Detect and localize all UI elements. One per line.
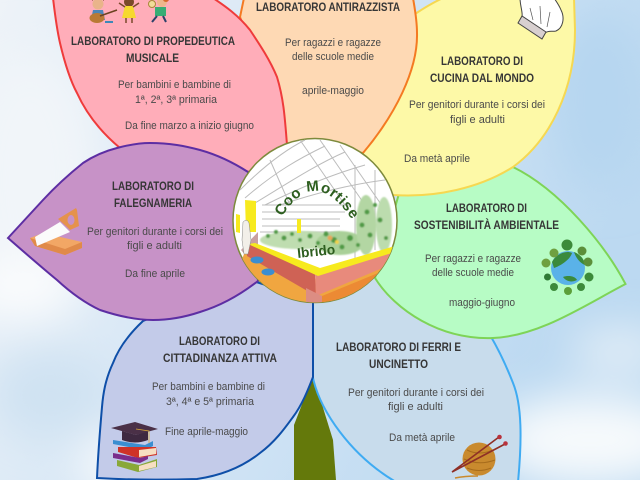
panel: laboratorio di falegnameria <box>8 143 258 320</box>
text: destinatari e periodo cittadinanza: Fine aprile-maggio <box>165 426 248 438</box>
text: destinatari e periodo musicale <box>118 79 254 132</box>
heading: ferri e uncinetto: UNCINETTO <box>369 357 428 371</box>
label: Ibrido: Ibrido <box>296 241 336 261</box>
heading: falegnameria <box>112 179 194 210</box>
heading: falegnameria: FALEGNAMERIA <box>114 196 192 210</box>
text: destinatari e periodo ferri <box>348 387 484 444</box>
text: destinatari e periodo cucina: Per genitori durante i corsi dei <box>409 99 545 111</box>
counter <box>242 253 390 302</box>
roof lines <box>240 140 385 260</box>
heading: ferri e uncinetto: LABORATORO DI FERRI E <box>336 340 461 354</box>
text: destinatari e periodo antirazzista: Per ragazzi e ragazze <box>285 37 381 49</box>
text: destinatari e periodo falegnameria <box>87 226 223 280</box>
heading: falegnameria: LABORATORO DI <box>112 179 194 193</box>
trunk <box>294 376 336 480</box>
text: destinatari e periodo musicale: Per bambini e bambine di <box>118 79 231 91</box>
plants <box>260 195 392 255</box>
heading: cittadinanza attiva: LABORATORO DI <box>179 334 260 348</box>
heading: propedeutica musicale: MUSICALE <box>126 51 179 65</box>
label: Coo Mortise: Coo Mortise <box>276 180 357 218</box>
text: destinatari e periodo sostenibilita: Per ragazzi e ragazze <box>425 253 521 265</box>
text: destinatari e periodo cucina <box>404 99 545 165</box>
heading: sostenibilita ambientale: LABORATORO DI <box>446 201 527 215</box>
text: destinatari e periodo sostenibilita: delle scuole medie <box>432 267 514 279</box>
text: destinatari e periodo cittadinanza: Per bambini e bambine di <box>152 381 265 393</box>
panel: laboratorio antirazzista <box>240 0 417 153</box>
icon: earth with trees <box>542 240 594 295</box>
text: destinatari e periodo ferri: Da metà aprile <box>389 432 455 444</box>
panel: laboratorio di cittadinanza attiva <box>97 280 313 480</box>
heading: propedeutica musicale <box>71 34 235 65</box>
text: destinatari e periodo musicale: 1ª, 2ª, 3ª primaria <box>135 94 218 106</box>
text: destinatari e periodo ferri: figli e adulti <box>388 401 443 413</box>
text: destinatari e periodo falegnameria: Da fine aprile <box>125 268 185 280</box>
center illustration: greenhouse sketch <box>232 138 398 304</box>
heading: cittadinanza attiva: CITTADINANZA ATTIVA <box>163 351 277 365</box>
text: destinatari e periodo sostenibilita: maggio-giugno <box>449 297 515 309</box>
panel: laboratorio di propedeutica musicale <box>53 0 287 172</box>
text: destinatari e periodo ferri: Per genitori durante i corsi dei <box>348 387 484 399</box>
text: destinatari e periodo antirazzista: aprile-maggio <box>302 85 364 97</box>
text: destinatari e periodo cittadinanza <box>152 381 265 438</box>
icon: chef hat <box>518 0 563 39</box>
heading: cittadinanza attiva <box>163 334 277 365</box>
heading: ferri e uncinetto <box>336 340 461 371</box>
text: destinatari e periodo antirazzista <box>285 37 381 97</box>
text: destinatari e periodo antirazzista: delle scuole medie <box>292 51 374 63</box>
text: destinatari e periodo falegnameria: figli e adulti <box>127 240 182 252</box>
heading: antirazzista: LABORATORO ANTIRAZZISTA <box>256 0 400 14</box>
icon: children playing music <box>90 0 169 23</box>
heading: cucina dal mondo <box>430 54 534 85</box>
panel: laboratorio di sostenibilita ambientale <box>375 167 626 338</box>
heading: sostenibilita ambientale <box>414 201 559 232</box>
text: destinatari e periodo cittadinanza: 3ª, 4ª e 5ª primaria <box>166 396 255 408</box>
panel: laboratorio di ferri e uncinetto <box>313 250 521 480</box>
heading: cucina dal mondo: CUCINA DAL MONDO <box>430 71 534 85</box>
icon: graduation cap and books <box>111 422 158 472</box>
icon: yarn ball and needles <box>452 435 508 478</box>
text: destinatari e periodo sostenibilita <box>425 253 521 309</box>
heading: cucina dal mondo: LABORATORO DI <box>441 54 523 68</box>
text: destinatari e periodo musicale: Da fine marzo a inizio giugno <box>125 120 254 132</box>
text: destinatari e periodo falegnameria: Per genitori durante i corsi dei <box>87 226 223 238</box>
panel: laboratorio di cucina dal mondo <box>360 0 575 196</box>
icon: saw on wood block <box>30 208 82 255</box>
text: destinatari e periodo cucina: Da metà aprile <box>404 153 470 165</box>
heading: propedeutica musicale: LABORATORO DI PROPEDEUTICA <box>71 34 235 48</box>
person and stools <box>242 220 251 254</box>
yellow columns <box>245 200 256 232</box>
heading: sostenibilita ambientale: SOSTENIBILITÀ AMBIENTALE <box>414 217 559 232</box>
text: destinatari e periodo cucina: figli e adulti <box>450 114 505 126</box>
